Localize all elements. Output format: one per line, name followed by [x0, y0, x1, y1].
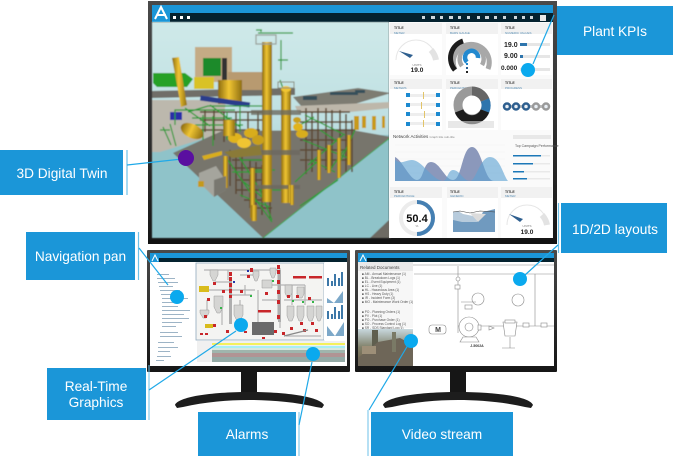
video stream still [358, 329, 413, 366]
monitor stand: right [383, 370, 533, 408]
callout: real-time graphics marker [149, 318, 248, 390]
label: Plant KPIs: Plant KPIs [583, 24, 647, 39]
label: Plant KPIs [557, 6, 673, 55]
label: Video stream: Video stream [402, 427, 482, 442]
KPI card: bars gauge: TITLE [450, 26, 460, 30]
label: Alarms [198, 412, 299, 456]
KPI card: numeric values: 9.00 [504, 53, 518, 60]
monitor: lower left process graphics [147, 250, 350, 372]
related documents panel: ■ LC - Live (1) [362, 284, 382, 288]
KPI card: meters: TITLE [394, 81, 404, 85]
KPI card: generic chart [447, 187, 498, 238]
KPI card: generic chart: TITLE [450, 190, 460, 194]
label: 3D Digital Twin [0, 150, 127, 195]
related documents panel: ■ MO - Maintenance Work Order (1) [362, 300, 413, 304]
KPI card: meter: TITLE [394, 26, 404, 30]
related documents panel: ■ PO - Planning Orders (1) [362, 310, 400, 314]
3D digital twin view [152, 22, 391, 238]
callout: 1D/2D marker [513, 245, 558, 286]
callout: alarms marker [299, 347, 320, 425]
KPI card: percentage donut: TITLE [450, 81, 460, 85]
related documents panel: ■ IR - Incident Form (3) [362, 296, 395, 300]
gold columns and vessels [262, 42, 272, 202]
navigation tree [156, 274, 190, 361]
monitor stand: left [175, 370, 324, 408]
pipe racks [200, 108, 355, 218]
1D/2D layout diagram [413, 265, 554, 348]
network activities area chart [393, 134, 559, 181]
KPI card: meters [390, 79, 442, 130]
label: Alarms: Alarms [226, 427, 268, 442]
KPI card: meter lower: TITLE [505, 190, 515, 194]
monitor: main 3D and KPI display [148, 1, 559, 244]
KPI card: progress [501, 79, 552, 130]
label: 3D Digital Twin: 3D Digital Twin [16, 166, 108, 181]
callout: navigation marker [139, 248, 184, 304]
related documents panel: ■ AM - Annual Maintenance (1) [362, 272, 406, 276]
label: Navigation pan [26, 232, 138, 280]
KPI card: meter lower: METER [505, 194, 516, 198]
KPI card: progress: PROGRESS [505, 86, 522, 90]
callout: Plant KPIs marker [521, 15, 554, 77]
callout: video stream marker [369, 334, 418, 410]
network activities area chart: Network Activities Graph title sub-title [393, 134, 455, 139]
related documents panel: ■ EL - Event Equipment (1) [362, 280, 400, 284]
KPI card: numeric values: TITLE [505, 26, 515, 30]
process graphic [196, 263, 324, 340]
label: Real-Time Graphics: Real-Time [65, 379, 127, 394]
related documents panel: ■ SR - SDS Standard Log (1) [362, 326, 403, 330]
KPI card: percentage ring [390, 187, 442, 238]
KPI card: progress: TITLE [505, 81, 515, 85]
KPI card: percentage ring: TITLE [394, 190, 404, 194]
KPI card: numeric values: 0.000 [501, 65, 518, 72]
KPI card: meter [390, 23, 442, 75]
network activities area chart: Top Campaign Performance [515, 144, 559, 148]
KPI dashboard panel [389, 22, 559, 238]
monitor: lower right documents and P&ID: M [435, 327, 441, 334]
KPI card: bars gauge [446, 23, 498, 75]
KPI card: generic chart: GENERIC [450, 194, 465, 198]
KPI card: percentage ring: % [416, 224, 419, 228]
related documents panel: ■ PV - Plot (1) [362, 314, 382, 318]
KPI card: meter: UNITS [412, 63, 422, 67]
related documents panel [358, 262, 413, 330]
mini bar charts [324, 263, 346, 340]
KPI card: numeric values: NUMERIC VALUES [505, 31, 531, 35]
KPI card: meter lower: 19.0 [521, 229, 534, 236]
equipment box [199, 166, 226, 197]
label: Video stream [368, 410, 513, 456]
background buildings [195, 47, 232, 82]
label: Real-Time Graphics [47, 365, 149, 420]
KPI card: meter lower: UNITS [522, 224, 532, 228]
far right plant items [303, 90, 365, 100]
KPI card: meter: 19.0 [411, 67, 424, 74]
related documents panel: ■ PO - Purchase Order (1) [362, 318, 400, 322]
app header bar [152, 5, 553, 22]
related documents panel: Related Documents [360, 265, 400, 270]
alarms table [197, 341, 345, 362]
KPI card: percentage donut [446, 79, 498, 130]
label: Navigation pan: Navigation pan [35, 249, 126, 264]
KPI card: meter lower [501, 187, 552, 238]
KPI card: meters: METERS [394, 86, 407, 90]
KPI card: bars gauge: BARS GAUGE [450, 31, 470, 35]
KPI card: percentage ring: 50.4 [406, 213, 429, 225]
related documents panel: ■ HS - Heavy Duty (1) [362, 292, 393, 296]
callout: 3D Digital Twin marker [127, 150, 194, 166]
KPI card: percentage ring: PERCENTAGE [394, 194, 414, 198]
KPI card: numeric values: 19.0 [504, 42, 518, 49]
label: 1D/2D layouts [558, 203, 667, 253]
monitor: lower right documents and P&ID: J-5002A [470, 344, 484, 348]
KPI card: numeric values [501, 23, 552, 75]
label: Real-Time Graphics: Graphics [69, 395, 124, 410]
KPI card: meter: METER [394, 31, 405, 35]
related documents panel: ■ SO - Process Control Log (1) [362, 322, 406, 326]
related documents panel: ■ HL - Hazardous Area (1) [362, 288, 399, 292]
KPI card: percentage donut: PERCENTAGE [450, 86, 470, 90]
label: 1D/2D layouts: 1D/2D layouts [572, 222, 658, 237]
monitor: lower right documents and P&ID [355, 250, 557, 372]
related documents panel: ■ BL - Breakdown Logs (1) [362, 276, 400, 280]
